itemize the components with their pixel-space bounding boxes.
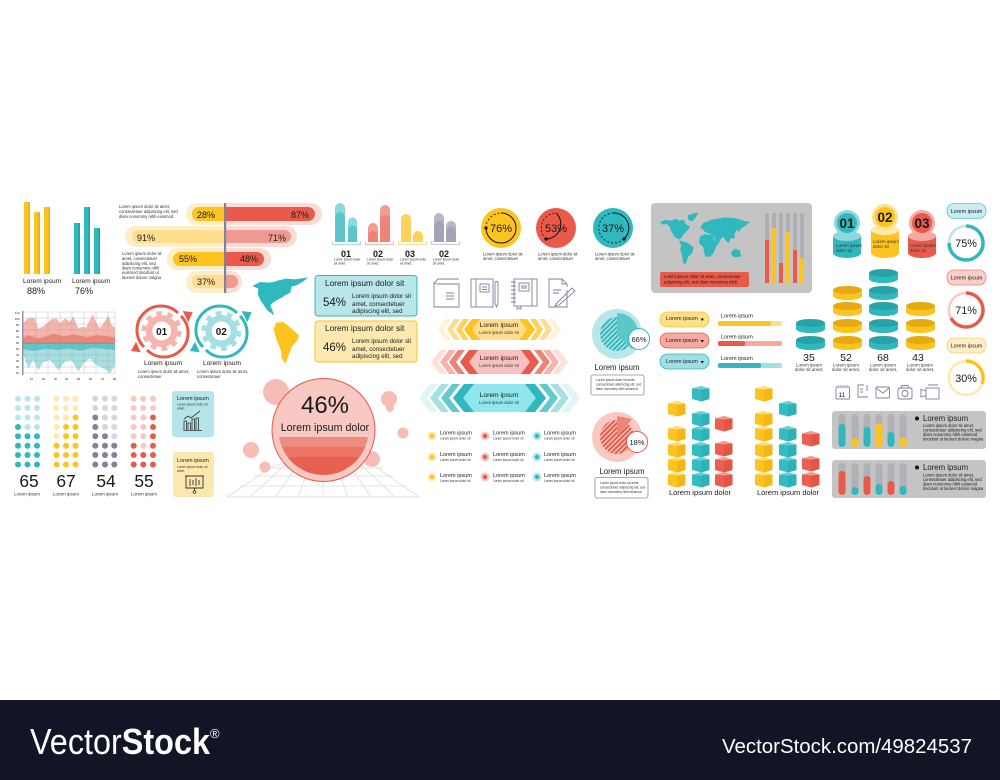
coin stack 35: dolor sit amet, — [795, 367, 823, 372]
registered mark: ® — [210, 726, 220, 741]
icon: spiral notebook — [511, 279, 537, 309]
area chart: 40 — [16, 353, 20, 357]
hatched pie 18% — [592, 412, 648, 498]
card: teal with chart icon: Lorem ipsum dolor sit — [177, 402, 208, 406]
card: teal with chart icon: Lorem ipsum — [177, 396, 209, 402]
cube chart 2: Lorem ipsum dolor — [757, 488, 820, 497]
bullet list: Lorem ipsum dolor sit — [440, 458, 471, 462]
text box: teal 54%: Lorem ipsum dolor sit — [325, 278, 405, 288]
gear 02 — [190, 306, 252, 379]
area chart — [15, 311, 117, 381]
funnel chart — [119, 203, 322, 293]
funnel chart: diam nonummy nibh — [122, 266, 160, 270]
chevron banner: yellow: Lorem ipsum dolor sit — [479, 330, 520, 335]
hatched pie 66% — [591, 309, 650, 395]
dot chart 55: Lorem ipsum — [131, 492, 157, 496]
text box: yellow 46%: amet, consectetuer — [352, 346, 405, 353]
progress circle 76%: amet, consectetuer — [483, 256, 519, 261]
cube chart 1 — [668, 386, 732, 497]
cylinder 03: Lorem ipsum — [910, 243, 936, 248]
hatched pie 18%: 18% — [629, 438, 645, 447]
text box: yellow 46% — [315, 321, 417, 362]
coin stack 68 — [869, 269, 898, 372]
area chart: 70 — [16, 335, 20, 339]
funnel chart: 37% — [197, 277, 215, 287]
donut 30%: 30% — [955, 373, 977, 385]
bubbles — [243, 379, 408, 472]
hatched pie 18%: consectetuer adipiscing elit, sed — [600, 486, 645, 490]
coin stack 68: Lorem ipsum — [870, 362, 896, 368]
bullet list: Lorem ipsum dolor sit — [544, 479, 575, 483]
area chart: 100 — [15, 317, 20, 321]
hatched pie 66%: consectetuer adipiscing elit, sed — [596, 382, 641, 386]
cylinder 02: 02 — [877, 210, 893, 225]
chevron banner: yellow: Lorem ipsum — [480, 322, 519, 329]
area chart: 20 — [42, 377, 46, 381]
funnel chart: consectetuer adipiscing elit, sed — [119, 209, 178, 214]
funnel chart: 55% — [179, 254, 197, 264]
area chart: 40 — [65, 377, 69, 381]
progress circle 76% — [481, 208, 523, 261]
bullet list: Lorem ipsum dolor sit — [544, 436, 575, 440]
area chart: 60 — [16, 341, 20, 345]
cylinder 02: dolor sit — [873, 244, 890, 249]
gear 01: Lorem ipsum — [144, 360, 183, 367]
hatched pie 66%: Lorem ipsum dolor sit amet, — [596, 378, 635, 382]
bullet list: Lorem ipsum dolor sit — [440, 436, 471, 440]
column group 02: sit amet, — [367, 262, 379, 266]
dot chart 65: 65 — [19, 471, 39, 491]
panel: bars with text 2: consectetuer adipiscing elit, sed — [923, 477, 982, 482]
donut 71%: 71% — [955, 305, 977, 317]
column group 01: Lorem ipsum dolor — [334, 258, 361, 262]
cylinder 02 — [871, 204, 899, 258]
area chart: 20 — [16, 365, 20, 369]
panel: bars with text 1: Lorem ipsum dolor sit amet, — [923, 423, 974, 428]
icon: document and pen — [549, 279, 575, 307]
donut 30% — [947, 338, 986, 395]
gear 02: Lorem ipsum dolor sit amet, — [197, 369, 248, 374]
bullet list: Lorem ipsum — [440, 430, 472, 436]
coin stack 35: 35 — [803, 352, 815, 364]
coin stack 52: 52 — [840, 352, 852, 364]
perspective grid floor — [227, 465, 419, 497]
bullet list: Lorem ipsum dolor sit — [493, 479, 524, 483]
card: yellow with presentation icon: amet, — [177, 469, 185, 473]
column group 04 — [432, 213, 460, 266]
column group 04: Lorem ipsum dolor — [433, 258, 460, 262]
panel: bars with text 1: diam nonummy nibh euismod — [923, 432, 978, 437]
area chart: 70 — [101, 377, 105, 381]
text box: yellow 46%: adipiscing elit, sed — [352, 353, 403, 360]
funnel chart: 28% — [197, 210, 215, 220]
donut 75% — [947, 204, 986, 260]
panel: world map — [651, 203, 812, 293]
donut 30%: Lorem ipsum — [951, 344, 983, 350]
coin stack 43: 43 — [912, 352, 924, 364]
panel: bars with text 1: consectetuer adipiscing elit, sed — [923, 428, 982, 432]
card: yellow with presentation icon: Lorem ipsum dolor sit — [177, 465, 208, 469]
coin stack 43: dolor sit amet, — [906, 367, 934, 372]
area chart: 110 — [15, 311, 20, 315]
funnel chart: adipiscing elit, sed — [122, 261, 157, 266]
coin stack 52: dolor sit amet, — [832, 367, 860, 372]
progress circle 37% — [593, 208, 635, 261]
card: teal with chart icon — [172, 391, 214, 437]
text box: yellow 46%: 46% — [323, 342, 346, 354]
footer band — [0, 700, 1000, 780]
column group 03: Lorem ipsum dolor — [400, 258, 427, 262]
area chart: 60 — [89, 377, 93, 381]
area chart: 50 — [16, 347, 20, 351]
column group 04: 02 — [439, 249, 449, 259]
progress circle 76%: 76% — [490, 223, 512, 235]
gear 01 — [131, 306, 193, 379]
area chart: 80 — [16, 329, 20, 333]
funnel chart: Lorem ipsum dolor sit — [122, 251, 162, 256]
cylinder 03: dolor sit — [910, 248, 927, 253]
card: yellow with presentation icon — [173, 452, 214, 497]
bullet list: Lorem ipsum — [440, 452, 472, 458]
footer logo: VectorStock — [30, 721, 211, 762]
coin stack 68: 68 — [877, 352, 889, 364]
text box: yellow 46%: Lorem ipsum dolor sit — [325, 323, 405, 333]
area chart: 80 — [113, 377, 117, 381]
text box: teal 54%: amet, consectetuer — [352, 301, 405, 308]
panel: world map: adipiscing elit, sed diam nonummy nibh — [664, 280, 738, 284]
dropdown pills — [660, 312, 709, 369]
column group 02: Lorem ipsum dolor — [367, 258, 394, 262]
hatched pie 66%: diam nonummy nibh euismod — [596, 387, 638, 391]
column group 02: 02 — [373, 249, 383, 259]
coin stack 52: Lorem ipsum — [833, 362, 859, 368]
panel: bars with text 2: tincidunt ut laoreet dolore magna — [923, 486, 984, 491]
bar chart: yellow 88% — [23, 202, 62, 296]
progress bars: Lorem ipsum — [721, 334, 753, 340]
area chart: 10 — [16, 371, 20, 375]
funnel chart: 91% — [137, 233, 155, 243]
progress bars — [718, 314, 782, 368]
bar chart: teal 76%: 76% — [75, 286, 93, 296]
text box: teal 54%: adipiscing elit, sed — [352, 308, 403, 315]
dot chart 65 — [14, 396, 40, 496]
icon: book — [434, 279, 459, 307]
column group 03: sit amet, — [400, 262, 412, 266]
dot chart 55: 55 — [134, 471, 154, 491]
hatched pie 18%: Lorem ipsum — [599, 467, 645, 476]
area chart: 10 — [30, 377, 34, 381]
funnel chart: laoreet dolore magna — [122, 275, 162, 280]
card: yellow with presentation icon: Lorem ipsum — [177, 458, 209, 464]
bullet list: Lorem ipsum — [544, 473, 576, 479]
bullet list: Lorem ipsum dolor sit — [544, 458, 575, 462]
chevron banner: teal — [419, 384, 580, 412]
text box: teal 54%: 54% — [323, 297, 346, 309]
progress circle 53%: amet, consectetuer — [538, 256, 574, 261]
cube chart 2 — [755, 386, 820, 497]
chevron banner: yellow — [438, 319, 561, 340]
coin stack 52 — [832, 286, 862, 372]
cylinder 01 — [833, 210, 862, 258]
funnel chart: 71% — [268, 233, 286, 243]
bar chart: teal 76% — [72, 207, 111, 296]
icon: notebook and pencil — [471, 279, 498, 307]
chevron banner: teal: Lorem ipsum — [480, 392, 519, 399]
icon row: calendar, memo, mail, camera, video — [836, 385, 939, 399]
area chart: 90 — [16, 323, 20, 327]
area chart: 30 — [54, 377, 58, 381]
column group 04: sit amet, — [433, 262, 445, 266]
panel: world map: Lorem ipsum dolor sit amet, consectetuer — [664, 274, 741, 279]
text box: teal 54% — [315, 276, 417, 316]
dropdown pills: Lorem ipsum — [666, 359, 698, 365]
bullet list: Lorem ipsum — [493, 473, 525, 479]
card: teal with chart icon: amet, — [177, 406, 185, 410]
cylinder 03: 03 — [914, 216, 930, 231]
column group 01: sit amet, — [334, 262, 346, 266]
funnel chart: Lorem ipsum dolor sit amet, — [119, 204, 170, 209]
column group 03: 03 — [405, 249, 415, 259]
dot chart 67: 67 — [56, 471, 76, 491]
coin stack 43: Lorem ipsum — [907, 362, 933, 368]
cylinder 02: Lorem ipsum — [873, 239, 899, 244]
area chart: 30 — [16, 359, 20, 363]
progress circle 37%: amet, consectetuer — [595, 256, 631, 261]
bullet list: Lorem ipsum — [493, 452, 525, 458]
hatched pie 18%: diam nonummy nibh euismod — [600, 490, 642, 494]
progress circle 37%: 37% — [602, 223, 624, 235]
progress circle 37%: Lorem ipsum dolor sit — [595, 252, 635, 256]
gear 02: consectetuer — [197, 374, 221, 379]
donut 71%: Lorem ipsum — [951, 276, 983, 282]
bullet list: Lorem ipsum dolor sit — [493, 458, 524, 462]
bullet list: Lorem ipsum dolor sit — [493, 436, 524, 440]
panel: bars with text 1: Lorem ipsum — [923, 414, 968, 423]
column group 01: 01 — [341, 249, 351, 259]
dot chart 55 — [131, 396, 157, 496]
big percentage circle: Lorem ipsum dolor — [281, 422, 370, 434]
dot chart 65: Lorem ipsum — [14, 492, 40, 496]
icon row: calendar, memo, mail, camera, video: 11 — [838, 392, 846, 399]
bullet list: Lorem ipsum dolor sit — [440, 479, 471, 483]
big percentage circle: 46% — [301, 392, 349, 419]
big percentage circle — [270, 378, 380, 482]
cube chart 1: Lorem ipsum dolor — [669, 488, 732, 497]
gear 02: Lorem ipsum — [203, 360, 242, 367]
panel: bars with text 1 — [832, 411, 986, 449]
funnel chart: 87% — [291, 210, 309, 220]
bar chart: yellow 88%: 88% — [27, 286, 45, 296]
progress bars: Lorem ipsum — [721, 314, 753, 320]
coin stack 35: Lorem ipsum — [796, 362, 822, 368]
hatched pie 66%: Lorem ipsum — [594, 363, 640, 372]
bullet list: Lorem ipsum — [493, 430, 525, 436]
bullet list: Lorem ipsum — [544, 452, 576, 458]
text box: yellow 46%: Lorem ipsum dolor sit — [352, 338, 411, 345]
bar chart: teal 76%: Lorem ipsum — [72, 278, 111, 285]
panel: bars with text 2: diam nonummy nibh euismod — [923, 482, 978, 486]
panel: bars with text 2: Lorem ipsum dolor sit amet, — [923, 472, 974, 478]
chevron banner: red — [431, 350, 568, 374]
dot chart 54: 54 — [96, 471, 116, 491]
donut 75%: Lorem ipsum — [951, 209, 983, 215]
dropdown pills: Lorem ipsum — [666, 338, 698, 344]
donut 71% — [947, 270, 986, 327]
progress circle 53%: 53% — [545, 223, 567, 235]
area chart: 50 — [77, 377, 81, 381]
chevron banner: red: Lorem ipsum — [480, 355, 519, 362]
panel: bars with text 1: tincidunt ut laoreet dolore magna — [923, 436, 984, 442]
gear 01: Lorem ipsum dolor sit amet, — [138, 369, 189, 374]
coin stack 43 — [906, 302, 935, 372]
coin stack 35 — [795, 319, 825, 372]
chevron banner: red: Lorem ipsum dolor sit — [479, 363, 520, 368]
progress bars: Lorem ipsum — [721, 356, 753, 362]
progress circle 53% — [536, 208, 578, 261]
column group 03 — [398, 214, 427, 266]
bar chart: yellow 88%: Lorem ipsum — [23, 278, 62, 285]
hatched pie 66%: 66% — [631, 335, 647, 344]
funnel chart: 48% — [240, 254, 258, 264]
dot chart 54 — [92, 396, 118, 496]
bullet list: Lorem ipsum — [544, 430, 576, 436]
chevron banner: teal: Lorem ipsum dolor sit — [479, 400, 520, 405]
progress circle 53%: Lorem ipsum dolor sit — [538, 252, 578, 256]
footer url: VectorStock.com/49824537 — [722, 736, 972, 758]
hatched pie 18%: Lorem ipsum dolor sit amet, — [600, 481, 639, 485]
cylinder 01: 01 — [839, 216, 855, 231]
gear 01: 01 — [156, 327, 168, 338]
gear 01: consectetuer — [138, 374, 162, 379]
dot chart 54: Lorem ipsum — [92, 492, 118, 496]
text box: teal 54%: Lorem ipsum dolor sit — [352, 293, 411, 300]
column group 01 — [332, 203, 361, 266]
dot chart 67: Lorem ipsum — [53, 492, 79, 496]
dropdown pills: Lorem ipsum — [666, 316, 698, 322]
column group 02 — [366, 205, 394, 266]
coin stack 68: dolor sit amet, — [869, 367, 897, 372]
map: north and south america — [252, 277, 308, 364]
dot chart 67 — [53, 396, 79, 496]
panel: bars with text 2: Lorem ipsum — [923, 463, 968, 472]
progress circle 76%: Lorem ipsum dolor sit — [483, 252, 523, 256]
donut 75%: 75% — [955, 238, 977, 250]
panel: bars with text 2 — [832, 460, 986, 498]
bullet list: Lorem ipsum — [440, 473, 472, 479]
cylinder 03 — [908, 210, 936, 258]
funnel chart: amet, consectetuer — [122, 256, 158, 261]
world map — [660, 213, 750, 264]
gear 02: 02 — [216, 327, 227, 338]
bullet list — [428, 430, 576, 483]
funnel chart: euismod tincidunt ut — [122, 270, 160, 275]
funnel chart: diam nonummy nibh euismod — [119, 214, 174, 219]
cylinder 01: dolor sit — [836, 248, 853, 253]
cylinder 01: Lorem ipsum — [836, 243, 862, 248]
